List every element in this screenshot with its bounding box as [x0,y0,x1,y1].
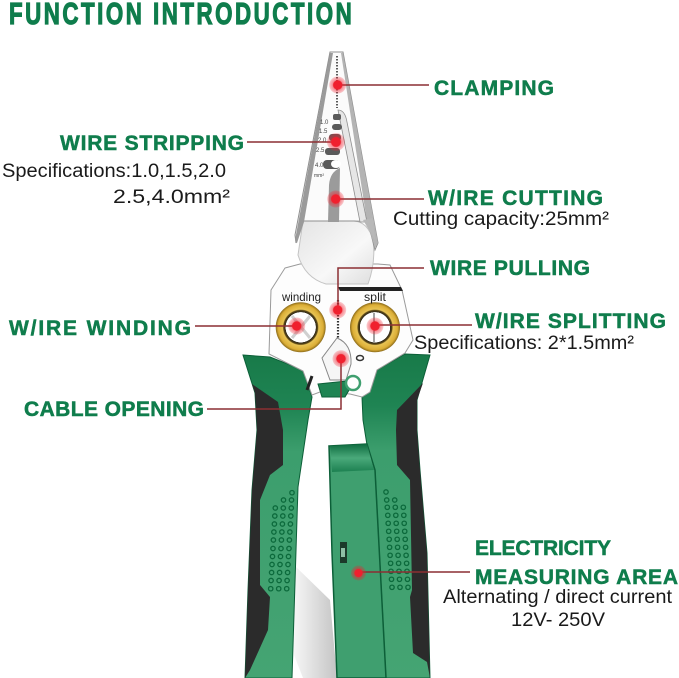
pliers jaw: 4.0 [315,163,324,169]
label: wire pulling: WIRE PULLING [430,257,590,280]
right handle [362,354,430,678]
text: stripping specifications [2,161,230,208]
left handle black grip [245,384,283,678]
label: electricity measuring area: MEASURING AREA [475,566,678,589]
winding ring [276,302,326,352]
plate with rings [269,264,413,397]
pliers jaw: 1.5 [319,129,328,135]
handle grip dots [268,490,410,591]
pivot latch [307,376,360,397]
label: electricity measuring area: ELECTRICITY [475,537,611,560]
label: wire cutting: W/IRE CUTTING [428,187,603,210]
split ring [350,302,400,352]
label: wire splitting: W/IRE SPLITTING [475,310,666,333]
right handle black grip [396,383,430,678]
label: clamping: CLAMPING [434,77,554,100]
tester switch [340,542,347,563]
marker dots [288,76,384,580]
label: wire winding: W/IRE WINDING [9,317,191,340]
text: measuring range: 12V- 250V [511,610,605,631]
winding engraving: winding [281,290,321,304]
tester body [329,444,386,678]
center slot [337,300,339,338]
text: splitting specifications: Specifications: 2*1.5mm² [414,333,634,354]
background shadow [294,565,337,678]
pliers jaw: 2.5 [316,148,325,154]
text: cutting capacity: Cutting capacity:25mm² [393,209,609,230]
text: stripping specifications: 2.5,4.0mm² [113,187,230,208]
pliers jaw [295,52,378,250]
text: measuring range [443,587,673,631]
gauge numbers: 1.0 [320,120,329,126]
pliers jaw: mm² [314,173,324,179]
text: stripping specifications: Specifications:1.0,1.5,2.0 [2,161,226,182]
label: wire stripping: WIRE STRIPPING [60,132,244,155]
leader lines [195,85,472,572]
split engraving: split [364,290,387,304]
label: electricity measuring area [475,537,678,589]
pliers illustration [243,52,430,678]
text: measuring range: Alternating / direct current [443,587,673,608]
left handle [243,355,312,678]
pliers jaw: 2.0 [318,138,327,144]
stripping notches [323,114,342,169]
steel head [298,221,374,284]
label: cable opening: CABLE OPENING [24,398,204,421]
